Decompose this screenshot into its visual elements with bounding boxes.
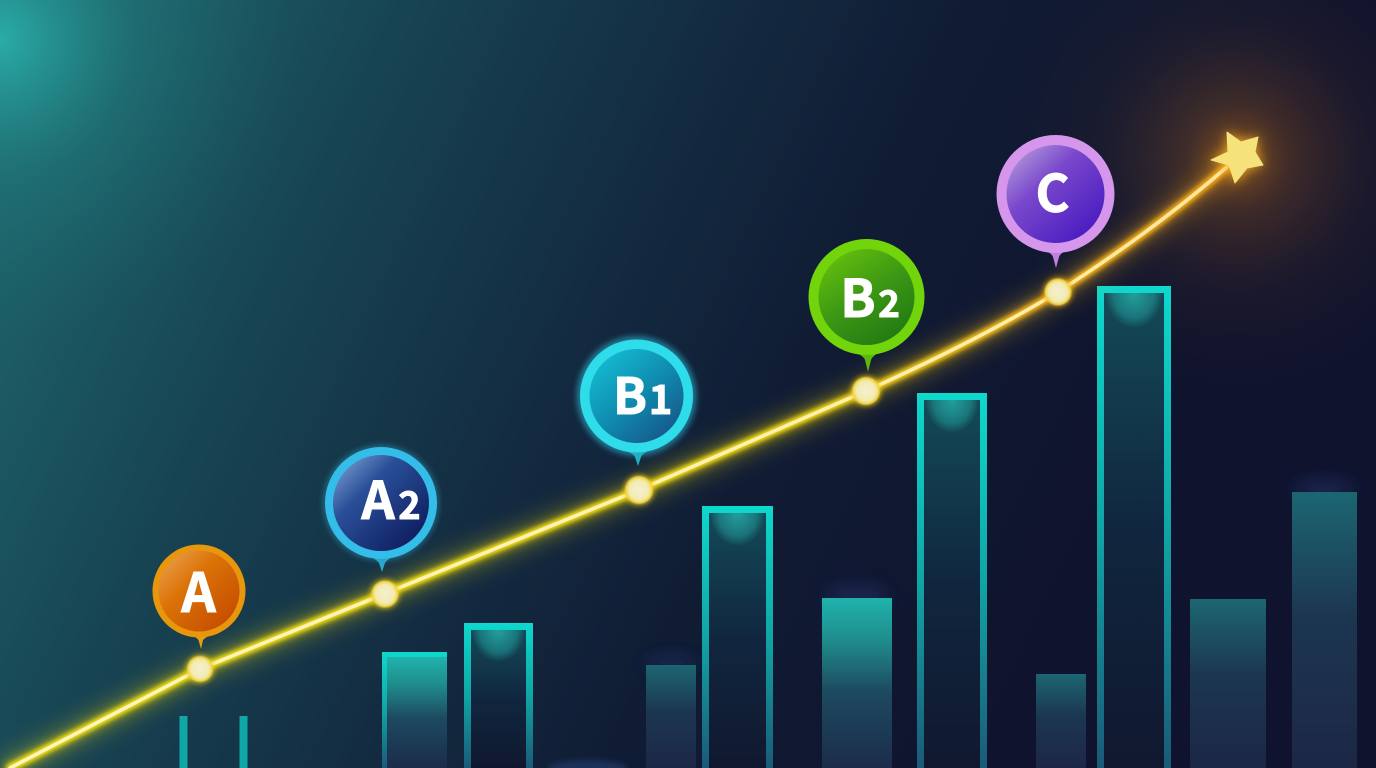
dot A2	[370, 578, 400, 610]
bar: faint 1	[646, 657, 696, 768]
pin A2	[323, 445, 439, 572]
pin B2: B	[840, 257, 876, 332]
icon: star	[1211, 132, 1263, 183]
bar: outlined 3	[917, 393, 987, 768]
bar: faint glow stub	[548, 760, 628, 768]
bar: solid 1	[382, 652, 447, 768]
bar: outlined 2	[702, 506, 773, 768]
pin B1: 1	[649, 368, 672, 426]
bar: outlined 1	[464, 623, 533, 768]
pin A2: 2	[398, 475, 421, 530]
bar: thin outline stub	[180, 716, 248, 768]
pin A2: A	[360, 459, 395, 534]
pin C	[996, 135, 1114, 268]
pin C: C	[1035, 152, 1070, 227]
bar: faint 4	[1292, 482, 1357, 768]
bar chart	[180, 286, 1357, 768]
dot A	[185, 654, 215, 684]
pin B1	[576, 336, 696, 466]
bar: outlined 4	[1097, 286, 1171, 768]
pin B2	[808, 239, 924, 372]
dot C	[1042, 276, 1074, 308]
bar: faint 2	[1036, 674, 1086, 768]
dot B2	[850, 375, 882, 407]
bar: faint 3	[1190, 599, 1266, 768]
growth line	[10, 166, 1228, 768]
pin A: A	[180, 549, 216, 628]
pin B1: B	[613, 357, 647, 429]
dot B1	[623, 474, 655, 506]
pin A	[152, 544, 246, 649]
marker dots	[185, 276, 1074, 684]
bar: solid 2	[822, 587, 892, 768]
pin B2: 2	[878, 274, 900, 328]
